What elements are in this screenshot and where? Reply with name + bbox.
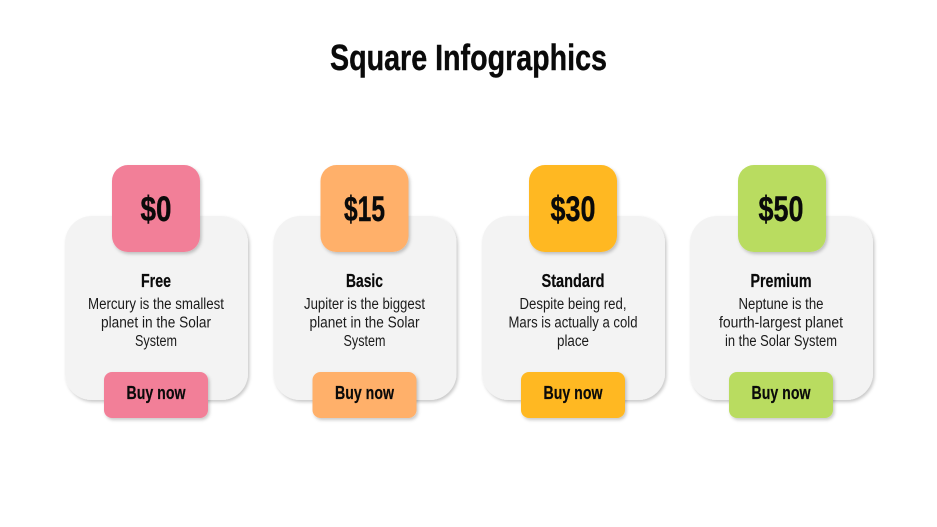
price badge: $30	[550, 190, 596, 229]
plan name: Free	[141, 270, 171, 291]
buy button	[312, 372, 416, 418]
buy button	[104, 372, 208, 418]
buy button	[729, 372, 833, 418]
description: in the Solar System	[725, 333, 837, 350]
description: Mars is actually a cold	[508, 314, 638, 332]
description	[508, 296, 638, 350]
description	[88, 296, 225, 350]
buy button: Buy now	[126, 382, 186, 403]
description: System	[344, 333, 386, 350]
description: planet in the Solar	[310, 314, 420, 332]
buy button: Buy now	[752, 382, 811, 403]
buy button: Buy now	[544, 382, 603, 403]
price badge	[320, 165, 408, 252]
plan name: Premium	[750, 270, 812, 291]
panel: Free plan	[65, 165, 248, 418]
description: Jupiter is the biggest	[304, 296, 426, 313]
card background	[274, 216, 456, 400]
price badge	[112, 165, 200, 252]
title: Square Infographics	[330, 37, 607, 78]
price badge	[738, 165, 826, 252]
panel: Standard plan	[482, 165, 665, 418]
description: System	[135, 333, 177, 350]
buy button	[521, 372, 625, 418]
description: fourth-largest planet	[719, 314, 844, 332]
description: Despite being red,	[520, 296, 626, 313]
description: planet in the Solar	[101, 314, 211, 332]
price badge: $15	[344, 190, 385, 229]
buy button: Buy now	[335, 382, 394, 403]
panel: Premium plan	[690, 165, 873, 418]
price badge: $0	[140, 190, 172, 229]
card background	[65, 216, 248, 400]
plan name: Standard	[542, 270, 604, 291]
panel: Basic plan	[274, 165, 456, 418]
description: Mercury is the smallest	[88, 296, 225, 313]
price badge: $50	[758, 190, 804, 229]
description	[304, 296, 426, 350]
description: place	[557, 333, 589, 350]
card background	[482, 216, 665, 400]
plan name: Basic	[346, 270, 383, 291]
description: Neptune is the	[738, 296, 824, 313]
card background	[690, 216, 873, 400]
description	[719, 296, 844, 350]
price badge	[529, 165, 617, 252]
